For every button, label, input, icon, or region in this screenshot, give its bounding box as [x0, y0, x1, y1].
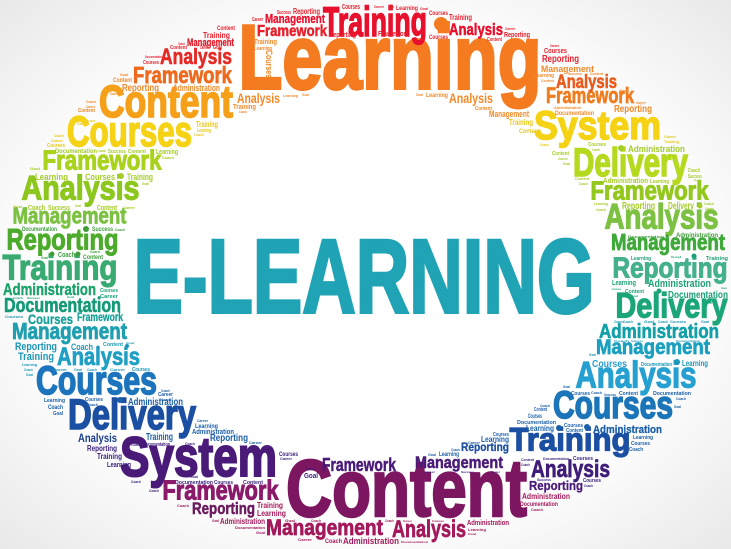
small words: yellow band: Training [509, 118, 533, 127]
word: Reporting purple: Reporting [529, 478, 583, 493]
small words: top red band: Reporting [542, 54, 579, 65]
word: Delivery blue: Delivery [68, 391, 196, 439]
small words: dark blue and purple band: Career [491, 470, 501, 474]
small words: teal-green band: Training [706, 256, 728, 262]
small words: yellow-green band: Success [688, 174, 702, 180]
word: Analysis green: Analysis [22, 170, 140, 208]
small words: blue band: Training [146, 432, 173, 443]
word: Analysis top: Analysis [449, 20, 503, 39]
small words: magenta and crimson band: Career [298, 537, 312, 542]
small words: orange band: Learning [426, 93, 448, 99]
small words: teal band: Goal [126, 341, 134, 345]
word: Analysis right blue: Analysis [576, 354, 696, 396]
small words: teal-green band: Learning [612, 280, 636, 287]
small words: orange band: Content [113, 78, 132, 84]
small words: orange band: Goal [302, 92, 309, 97]
small words: magenta and crimson band: Learning [257, 509, 286, 518]
small words: teal band: Documentation [676, 339, 700, 343]
small words: teal-green band: Content [625, 289, 644, 295]
small words: top red band: Framework [378, 31, 409, 38]
small words: yellow-green band: Coach [688, 168, 700, 174]
small words: yellow band: Coach [54, 133, 64, 138]
small words: blue band: Coach [87, 402, 98, 407]
small words: blue band: Coach [48, 405, 63, 411]
small words: yellow band: Courses [47, 143, 65, 149]
small words: teal band: Training [18, 351, 54, 363]
small words: teal band: Coach [87, 367, 97, 372]
small words: green band: Coach [115, 227, 125, 232]
small words: magenta and crimson band: Administration [343, 536, 399, 546]
small words: blue band: Learning [526, 424, 554, 433]
small words: blue band: Coach [161, 397, 171, 402]
small words: blue band: Goal [428, 452, 436, 457]
small words: green band: Content [83, 255, 103, 261]
small words: dark blue and purple band: Documentation [175, 480, 213, 486]
small words: yellow-green band: Coach [592, 147, 600, 152]
small words: magenta and crimson band: Administration [467, 520, 509, 527]
small words: teal band: Career [53, 367, 67, 372]
small words: teal band: Reporting [15, 341, 57, 353]
small words: dark blue and purple band: Coach [185, 441, 195, 446]
small words: orange band: Content [541, 78, 555, 83]
small words: orange band: Success [568, 71, 583, 76]
small words: yellow-green band: Coach [162, 155, 175, 160]
small words: teal band: Courses [5, 314, 24, 319]
small words: dark blue and purple band: Content [243, 480, 263, 486]
small words: blue band: Learning [481, 435, 509, 444]
small words: orange band: Reporting [614, 104, 652, 115]
small words: blue band: Coach [540, 403, 550, 408]
small words: green band: Coach [58, 252, 75, 259]
small words: blue band: Documentation [653, 391, 691, 397]
word: Framework right orange: Framework [546, 83, 635, 108]
small words: dark blue and purple band: Success [537, 477, 552, 482]
small words: blue band: Courses [493, 432, 509, 438]
small words: blue band: Administration [128, 397, 183, 408]
small words: magenta and crimson band: Administration [220, 517, 265, 526]
small words: teal-green band: Goal [631, 294, 638, 298]
small words: teal-green band: Goal [671, 255, 681, 259]
small words: blue band: Content [619, 391, 638, 397]
small words: orange band: Analysis [237, 90, 280, 106]
small words: teal-green band [13, 254, 728, 301]
word: Administration blue: Administration [593, 424, 662, 436]
dot: top orange [434, 17, 448, 31]
small words: yellow-green band: Goal [694, 178, 701, 182]
small words: dark blue and purple band: Content [521, 457, 535, 462]
small words: yellow band: Courses [85, 118, 95, 123]
small words: top red band: Success [277, 10, 291, 16]
small words: teal-green band: Success [27, 296, 40, 300]
small words: yellow band: Training [196, 120, 218, 129]
word: System purple: System [120, 425, 277, 488]
small words: top red band: Goal [213, 45, 222, 51]
small words: teal band: Goal [589, 352, 596, 357]
small words: yellow-green band: Training [127, 172, 153, 182]
small words: magenta and crimson band: Coach [311, 518, 321, 523]
word: Reporting magenta: Reporting [192, 499, 255, 518]
small words: dark blue and purple band: Documentation [143, 442, 170, 448]
small words: magenta and crimson band: Documentation [235, 525, 266, 530]
small words: teal band: Goal [701, 319, 709, 324]
small words: orange band: Management [489, 109, 529, 119]
small words: yellow-green band: Success [108, 149, 126, 155]
small words: magenta and crimson band: Coach [385, 518, 394, 523]
small words: teal band: Coach [623, 319, 633, 324]
small words: yellow band: Coach [540, 142, 549, 147]
small words: teal band: Goal [644, 319, 654, 324]
word: Content orange: Content [99, 76, 233, 127]
small words: yellow-green band: Success [48, 205, 70, 212]
small words: magenta and crimson band: Documentation [401, 540, 428, 544]
small words: teal-green band: Coach [13, 296, 23, 300]
small words: yellow-green band: Reporting [622, 201, 655, 212]
small words: orange band: Learning [283, 93, 298, 98]
small words: teal band: Learning [22, 362, 37, 367]
word: Framework red: Framework [257, 23, 327, 40]
small words: dark blue and purple band: Courses [573, 456, 593, 462]
small words: magenta and crimson band: Success [403, 519, 412, 523]
small words: dark blue and purple band: Coach [584, 483, 593, 488]
small words: yellow-green band: Content [552, 151, 569, 157]
small words: dark blue and purple band: Goal [304, 473, 318, 480]
small words: yellow-green band: Goal [563, 161, 570, 166]
word: Framework magenta: Framework [162, 474, 279, 506]
small words: teal band: Goal [74, 367, 82, 372]
small words: yellow-green band: Courses [588, 142, 606, 148]
small words: teal-green band: Administration [648, 278, 711, 290]
word: Administration left: Administration [3, 280, 96, 299]
small words: top red band: Reporting [504, 32, 530, 39]
small words: teal band: Coach [658, 319, 668, 324]
small words: yellow band: Content [519, 129, 540, 135]
small words: teal band: Learning [682, 359, 708, 368]
small words: yellow-green band: Goal [142, 181, 149, 186]
small words: blue band: Learning [633, 435, 653, 441]
small words: orange band: Courses [264, 50, 274, 78]
small words: yellow-green band: Content [575, 176, 590, 181]
small words: teal band: Career [614, 319, 624, 324]
small words: orange band: Goal [620, 88, 628, 93]
small words: orange band: Training [233, 104, 256, 111]
small words: yellow-green band: Learning [650, 179, 669, 185]
small words: teal-green band: Career [100, 294, 118, 300]
word: Analysis teal-blue: Analysis [57, 343, 140, 371]
small words: top red band: Career [550, 43, 559, 48]
small words: orange band: Goal [416, 92, 423, 97]
small words: top red band: Courses [429, 11, 449, 17]
word: Courses yellow: Courses [67, 108, 192, 156]
small words: dark blue and purple band: Career [280, 456, 292, 461]
small words: orange band: Career [110, 91, 120, 96]
small words: top red band: Reporting [293, 7, 320, 16]
word: Reporting dark blue: Reporting [461, 440, 509, 454]
small words: blue band: Documentation [517, 420, 556, 426]
small words: teal-green band: Learning [631, 256, 651, 262]
small words: blue band: Learning [44, 398, 65, 404]
small words: blue band: Courses [528, 414, 542, 420]
small words: dark blue and purple band: Coach [149, 488, 159, 493]
small words: yellow-green band: Courses [85, 172, 115, 182]
small words: top red band: Content [170, 45, 187, 51]
small words: teal band: Coach [71, 342, 93, 352]
small words: blue band: Learning [195, 424, 218, 430]
word: Management crimson: Management [266, 515, 384, 540]
small words: teal-green band: Career [721, 286, 728, 290]
small words: yellow band: Goal [77, 121, 84, 126]
small words: top red band: Career [252, 17, 263, 23]
small words: orange band: Management [541, 64, 594, 74]
small words: orange band: Administration [173, 83, 220, 93]
word: Framework small teal: Framework [77, 310, 123, 324]
small words: teal band: Career [110, 367, 126, 372]
small words: magenta and crimson band: Coach [177, 503, 190, 508]
small words: green band: Coach [90, 249, 100, 254]
small words: dark blue and purple band: Reporting [87, 444, 117, 453]
small words: green band: Administration [676, 233, 718, 239]
small words: teal band: Coach [614, 339, 629, 343]
small words: top red band: Courses [143, 60, 159, 66]
small words: green band: Documentation [628, 234, 665, 239]
small words: orange band: Learning [534, 73, 554, 79]
small words: dark blue and purple band: Coach [521, 462, 530, 467]
small words: yellow-green band: Content [128, 149, 146, 155]
word: Content magenta: Content [286, 444, 527, 534]
small words: magenta and crimson band: Goal [256, 530, 265, 535]
small words: orange band: Documentation [555, 111, 594, 117]
small words: yellow-green band: Delivery [668, 201, 694, 212]
small words: yellow-green band: Career [558, 156, 568, 161]
small words: blue band: Reporting [210, 433, 248, 444]
small words: yellow-green band: Documentation [55, 149, 97, 155]
small words: yellow-green band: Coach [98, 148, 106, 153]
small words: blue band: Content [566, 428, 583, 434]
small words: blue band: Learning [439, 452, 459, 458]
small words: yellow band: Career [664, 134, 676, 139]
small words: yellow band: Career [51, 138, 63, 143]
word: Management purple: Management [415, 453, 503, 472]
small words: orange band: Goal [120, 72, 128, 77]
word: Documentation left: Documentation [4, 295, 121, 317]
small words: green band: Documentation [22, 227, 57, 233]
small words: blue band: Courses [85, 397, 103, 403]
small words: top red band: Coach [178, 41, 185, 46]
small words: orange band: Content [78, 108, 95, 114]
small words: yellow-green band: Learning [35, 172, 68, 182]
small words: teal-green band: Courses [100, 288, 118, 294]
small words: yellow-green band: Administration [628, 144, 685, 154]
small words: teal-green band: Courses [612, 287, 621, 291]
small words: blue band: Career [468, 440, 480, 445]
small words: orange band: Career [636, 100, 646, 105]
small words: orange band: Learning [254, 46, 272, 52]
small words: top red band: Learning [396, 6, 418, 12]
small words: orange band: Analysis [449, 90, 493, 106]
small words: orange band [78, 39, 652, 119]
small words: top red band: Career [374, 4, 384, 9]
small words: magenta and crimson band: Goal [468, 532, 476, 536]
small words: blue band: Coach [591, 390, 602, 395]
word: Management red: Management [265, 11, 325, 26]
small words: dark blue and purple band: Success [461, 470, 474, 474]
small words: top red band: Career [505, 26, 515, 31]
small words: magenta and crimson band: Goal [212, 518, 219, 523]
small words: blue band: Coach [451, 447, 460, 452]
small words: yellow-green band: Career [123, 205, 135, 210]
small words: blue band: Goal [563, 384, 570, 389]
word: Analysis purple: Analysis [531, 456, 610, 483]
small words: dark blue and purple band: Analysis [78, 431, 117, 445]
word: Framework yellow-green: Framework [42, 144, 162, 176]
small words: teal band: Success [631, 339, 643, 343]
small words: yellow band: Coach [194, 132, 204, 137]
small words: orange band: Content [475, 106, 492, 112]
small words: yellow-green band: Goal [75, 203, 81, 208]
small words: yellow-green band: Coach [28, 205, 45, 212]
small words: blue band: Success [604, 392, 617, 397]
small words: yellow-green band: Career [705, 206, 714, 211]
small words: yellow-green band [13, 142, 714, 212]
small words: top red band: Career [200, 45, 208, 51]
word: Management teal: Management [12, 318, 127, 344]
small words: teal band: Goal [26, 372, 33, 377]
word: Management green: Management [12, 202, 127, 228]
word: Management right teal: Management [596, 336, 710, 359]
word: Courses right blue: Courses [553, 384, 673, 427]
small words: top red band: Courses [544, 48, 567, 55]
small words: dark blue and purple band: Coach [131, 479, 141, 484]
small words: top red band: Courses [429, 35, 449, 41]
small words: blue band: Goal [53, 411, 64, 417]
small words: top red band: Training [449, 13, 472, 22]
small words: orange band: Administration [554, 105, 582, 110]
small words: yellow-green band: Coach [704, 201, 714, 206]
small words: yellow-green band: Learning [156, 149, 178, 156]
word: Analysis red: Analysis [160, 44, 232, 69]
word: Analysis right orange: Analysis [556, 72, 617, 93]
small words: top red band: Training [203, 31, 230, 40]
small words: yellow-green band: Goal [13, 204, 22, 209]
small words: dark blue and purple band: Learning [107, 462, 131, 469]
small words: dark blue and purple band: Coach [131, 442, 141, 447]
small words: teal band: Coach [24, 367, 33, 372]
small words: top red band [143, 4, 579, 66]
small words: yellow-green band: Coach [596, 207, 606, 212]
small words: yellow band: Training [664, 139, 680, 144]
small words: dark blue and purple band: Courses [583, 478, 601, 484]
small words: green band: Goal [41, 255, 48, 260]
small words: blue band: Courses [564, 423, 583, 429]
small words: blue band: Coach [161, 388, 170, 393]
small words: magenta and crimson band: Coach [325, 539, 342, 545]
small words: blue band: Coach [676, 396, 686, 401]
small words: blue band: Coach [629, 447, 643, 453]
word: Framework right: Framework [590, 178, 709, 206]
small words: magenta and crimson band: Documentation [520, 502, 558, 508]
small words: dark blue and purple band: Documentation [543, 456, 569, 461]
word: Framework orange: Framework [133, 62, 232, 88]
small words: top red band: Content [487, 37, 502, 43]
small words: dark blue and purple band: Courses [214, 480, 233, 486]
small words: magenta and crimson band: Coach [531, 507, 544, 512]
small words: blue band: Career [249, 440, 262, 445]
small words: dark blue and purple band [78, 431, 601, 493]
small words: magenta and crimson band: Goal [285, 518, 295, 523]
small words: top red band: Goal [420, 6, 428, 11]
small words: orange band: Coach [239, 109, 247, 114]
small words: blue band [44, 384, 691, 458]
small words: dark blue and purple band: Training [97, 452, 122, 461]
small words: dark blue and purple band: Coach [305, 466, 315, 471]
small words: dark blue and purple band: Goal [190, 474, 198, 479]
small words: magenta and crimson band [177, 492, 570, 546]
small words: yellow band: Learning [197, 128, 211, 134]
small words: orange band: Reporting [122, 83, 159, 94]
small words: magenta and crimson band: Training [257, 501, 283, 510]
small words: teal band: Courses [132, 367, 150, 373]
small words: blue band: Goal [674, 404, 681, 409]
small words: yellow-green band: Content [97, 205, 117, 212]
small words: green band [22, 226, 718, 261]
word: Training teal-green: Training [2, 248, 118, 288]
small words: blue band: Courses [631, 441, 650, 447]
small words: yellow-green band: Administration [603, 178, 648, 185]
small words: teal-green band: Goal [67, 295, 74, 299]
small words: top red band: Content [217, 26, 235, 32]
small words: dark blue and purple band: Courses [279, 452, 299, 458]
small words: magenta and crimson band: Learning [468, 527, 487, 532]
small words: teal band: Content [103, 342, 123, 348]
small words: orange band: Career [86, 104, 95, 109]
word: Courses blue: Courses [36, 359, 157, 403]
small words: yellow-green band: Learning [594, 201, 608, 206]
small words: orange band: Training [254, 39, 277, 46]
word: Courses small teal: Courses [28, 311, 73, 327]
small words: top red band: Reporting [329, 32, 356, 39]
small words: magenta and crimson band: Administration [522, 492, 570, 501]
small words: teal band: Documentation [641, 362, 672, 368]
word: Reporting green: Reporting [6, 224, 118, 256]
small words: blue band: Career [197, 418, 208, 423]
small words: top red band: Documentation [145, 54, 162, 59]
word: Training dark blue: Training [510, 422, 630, 458]
word: Delivery right yellow-green: Delivery [573, 141, 689, 185]
word: Learning: Learning [238, 8, 542, 108]
small words: blue band: Career [158, 392, 173, 398]
word: Courses right small: Courses [592, 359, 627, 370]
small words: yellow-green band: Goal [30, 166, 40, 171]
small words: orange band: Coach [86, 99, 96, 104]
word: Analysis crimson: Analysis [392, 516, 466, 543]
word: Framework purple: Framework [322, 455, 397, 475]
small words: teal band: Courses [670, 319, 687, 324]
small words: top red band: Courses [342, 4, 360, 11]
small words: blue band: Content [534, 407, 547, 413]
small words: teal band [5, 314, 709, 377]
small words: blue band: Courses [571, 391, 590, 397]
small words: blue band: Administration [192, 429, 234, 436]
small words: magenta and crimson band: Career [432, 519, 445, 523]
small words: orange band: Content [590, 71, 604, 76]
word: System yellow: System [534, 104, 661, 148]
small words: dark blue and purple band: Career [423, 470, 436, 474]
word: Management left red: Management [187, 37, 234, 49]
small words: yellow band [47, 118, 680, 149]
small words: green band: Success [92, 227, 114, 233]
small words: yellow-green band: Coach [579, 181, 588, 186]
